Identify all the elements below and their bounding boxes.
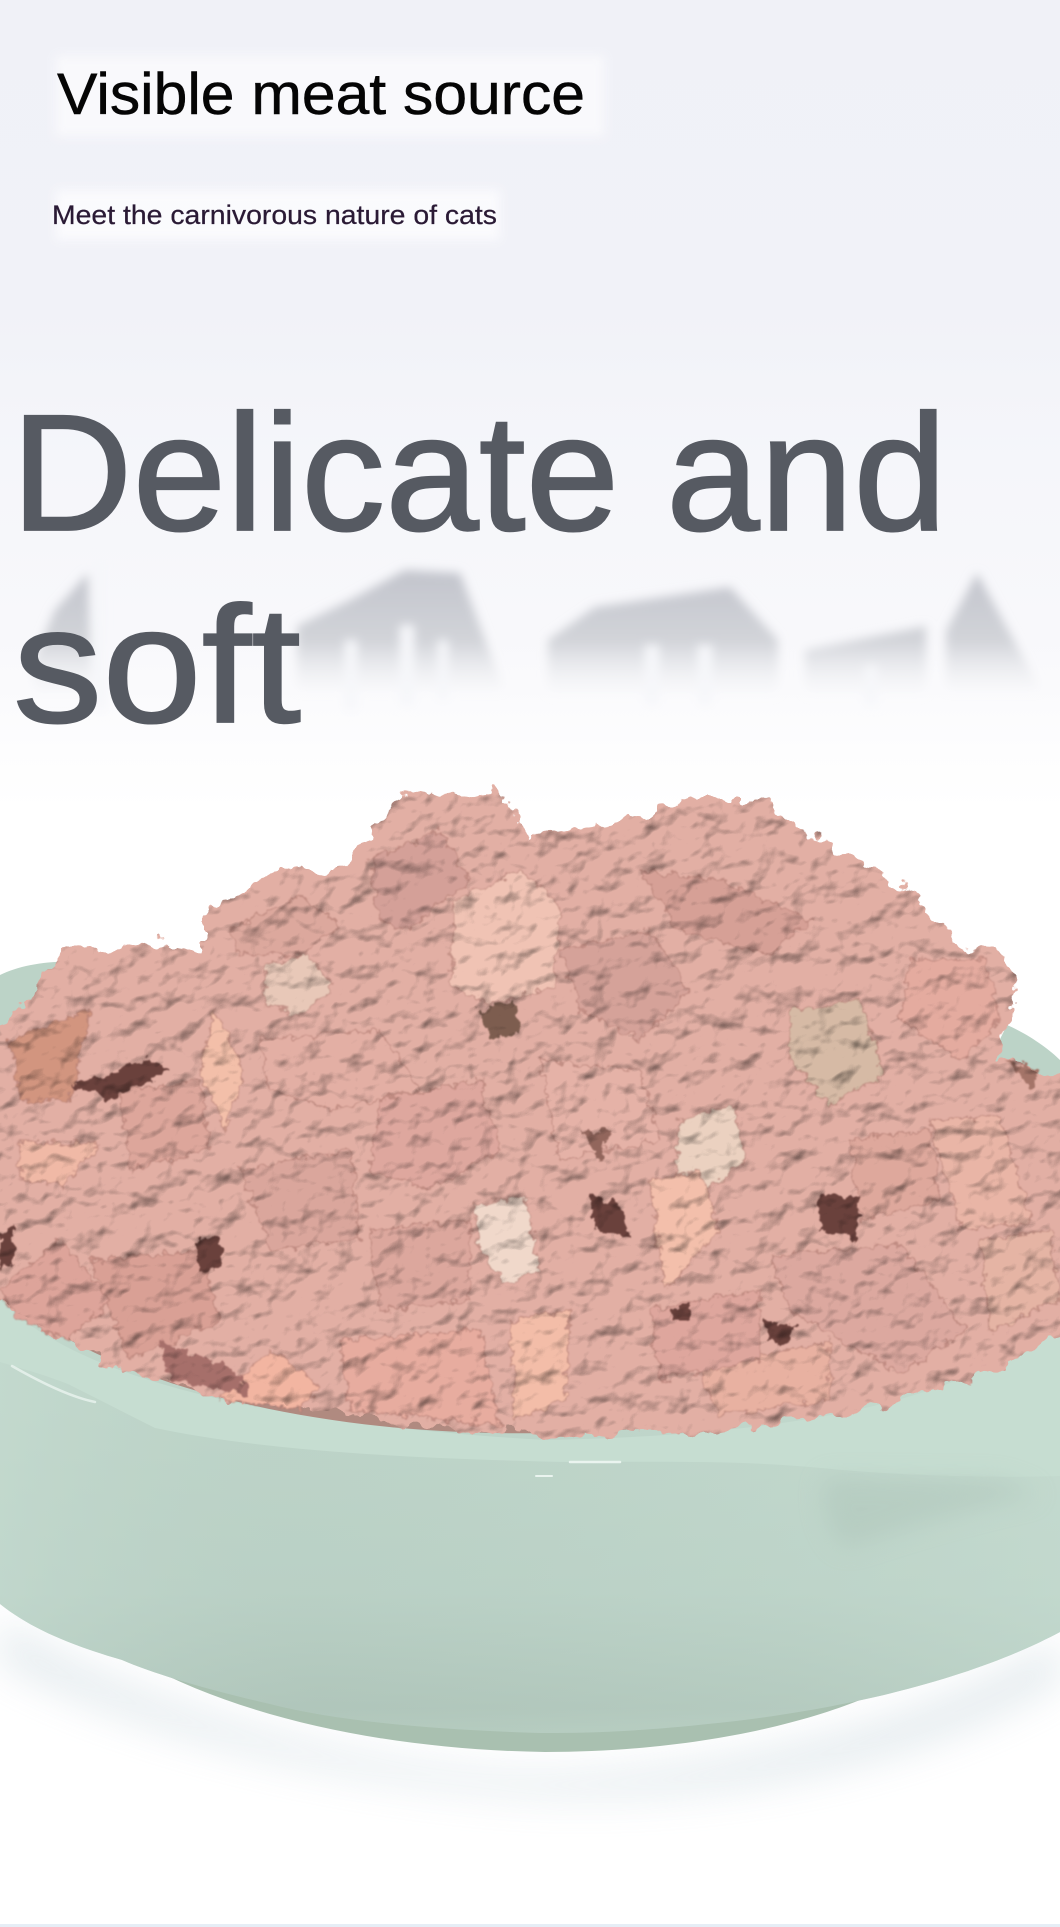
right handle shadow xyxy=(823,1478,1040,1548)
bottom edge tint xyxy=(0,1924,1060,1927)
bowl foot xyxy=(140,1662,860,1752)
bowl inner shadow under meat xyxy=(0,1260,1060,1433)
meat pile xyxy=(0,786,1060,1436)
subtitle: Meet the carnivorous nature of cats xyxy=(52,200,497,230)
meat silhouette base xyxy=(0,786,1060,1436)
white patch behind subtitle xyxy=(56,190,500,240)
rim highlights xyxy=(12,1366,620,1476)
bowl xyxy=(0,962,1060,1752)
bowl shadow xyxy=(0,1620,1060,1796)
bowl back rim xyxy=(0,962,1060,1120)
bowl rim band xyxy=(0,1300,1060,1477)
headline line 2: soft xyxy=(13,573,301,758)
meat light flakes xyxy=(0,830,1060,1425)
meat dark crevices xyxy=(0,1000,1040,1395)
bowl side shading xyxy=(0,1280,1060,1733)
bowl body xyxy=(0,1280,1060,1733)
white patch behind title xyxy=(56,56,604,136)
headline line 1: Delicate and xyxy=(11,381,947,566)
title: Visible meat source xyxy=(57,62,585,127)
ghost product silhouettes xyxy=(34,560,1041,710)
meat surface relief xyxy=(0,786,1060,1436)
